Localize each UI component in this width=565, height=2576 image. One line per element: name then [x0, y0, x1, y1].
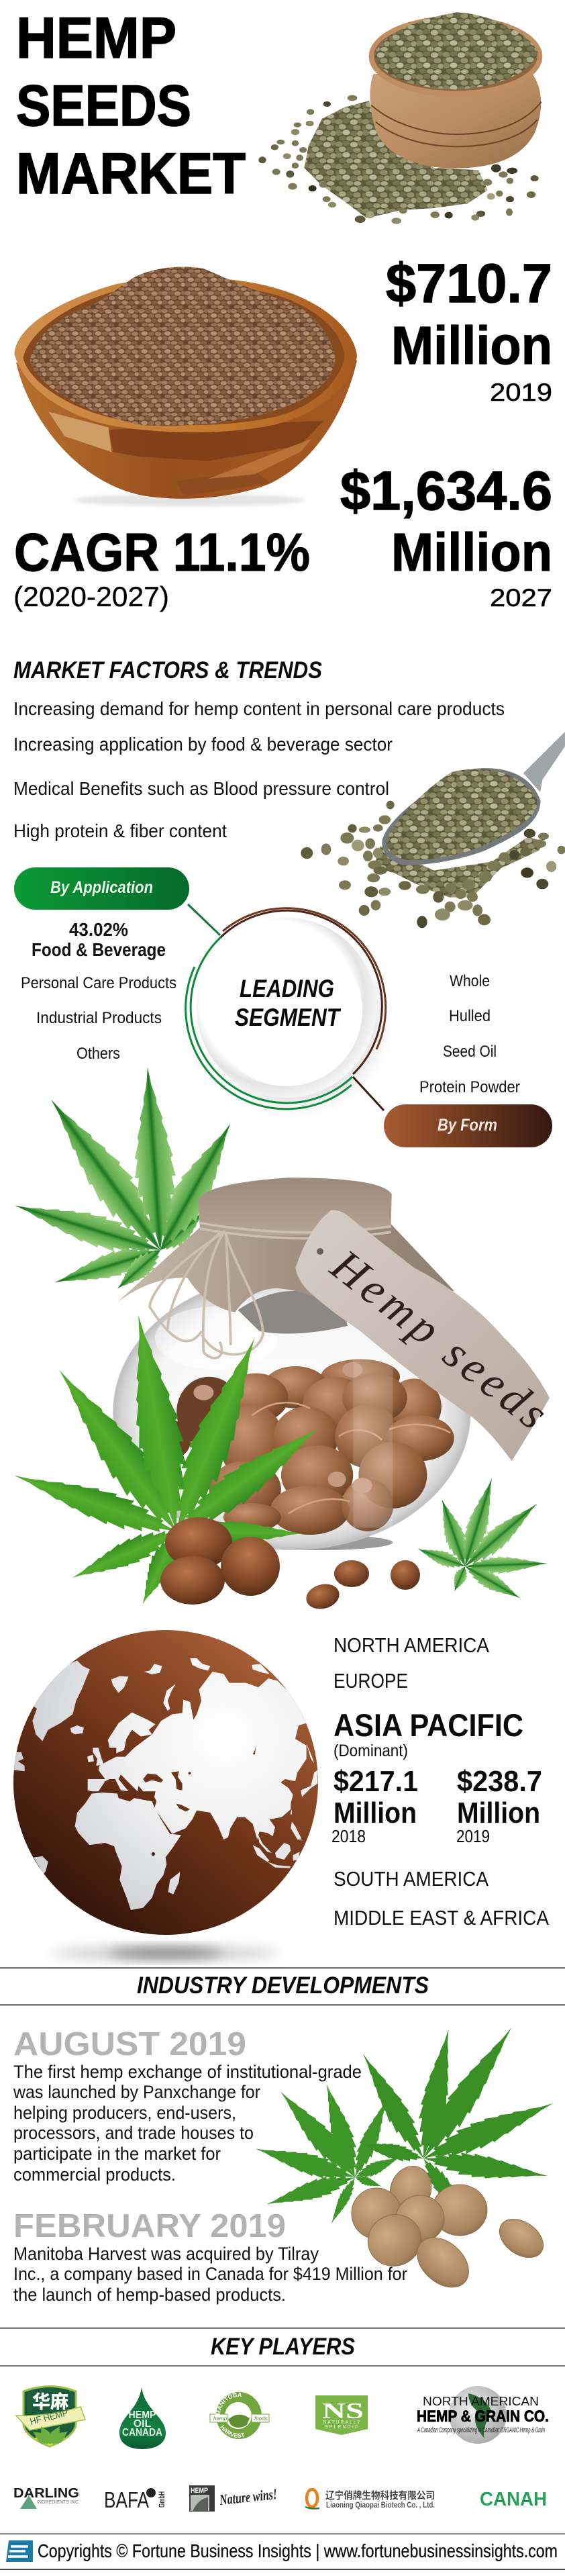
dominant region: asia pacific	[331, 1707, 542, 1846]
market factors list: High protein & fiber content	[13, 820, 227, 841]
value 2027: Million	[391, 522, 552, 582]
logo: HF Hemp	[16, 2386, 85, 2448]
application segments list: Food & Beverage	[32, 939, 166, 960]
logo: Hempflax: HEMP	[191, 2487, 208, 2495]
image: spoon with hemp seeds	[301, 732, 565, 928]
form segments list: Whole	[450, 972, 490, 990]
value 2027: $1,634.6	[340, 461, 552, 522]
logo: Liaoning Qiaopai Biotech: 辽宁俏牌生物科技有限公司	[325, 2489, 435, 2501]
heading: market factors and trends: MARKET FACTORS & TRENDS	[13, 657, 322, 683]
CAGR: CAGR 11.1%	[14, 522, 310, 582]
development: August 2019: commercial products.	[13, 2164, 176, 2185]
development: February 2019: the launch of hemp-based products.	[13, 2285, 286, 2305]
value 2019	[386, 253, 552, 406]
hang tag label: Hemp seeds	[321, 1239, 558, 1439]
dominant region: asia pacific: $217.1	[333, 1765, 418, 1798]
icon: small hemp leaf	[415, 1475, 548, 1606]
logo: Naturally Splendid	[315, 2395, 368, 2435]
development: February 2019	[13, 2208, 407, 2305]
development: August 2019: participate in the market for	[13, 2144, 221, 2164]
development: August 2019: was launched by Panxchange for	[13, 2082, 260, 2102]
regional list: SOUTH AMERICA	[333, 1867, 489, 1891]
dominant region: asia pacific: 2018	[331, 1826, 366, 1846]
development: August 2019: AUGUST 2019	[13, 2026, 246, 2062]
logo: Manitoba Harvest: foods	[254, 2416, 268, 2422]
application segments list: 43.02%	[69, 919, 128, 940]
heading: key players: KEY PLAYERS	[211, 2334, 355, 2360]
pill: by application	[14, 867, 189, 910]
regional list	[333, 1633, 549, 1929]
logo: Darling Ingredients: INGREDIENTS INC.	[37, 2500, 80, 2505]
illustration: glass jar of hemp seeds	[113, 1274, 470, 1550]
regional list: EUROPE	[333, 1669, 408, 1692]
logo: Naturally Splendid: NATURALLY	[323, 2420, 360, 2425]
dominant region: asia pacific: (Dominant)	[333, 1742, 408, 1760]
title	[16, 6, 246, 206]
market factors list: Medical Benefits such as Blood pressure control	[13, 778, 389, 799]
logo: Darling Ingredients	[13, 2486, 80, 2509]
illustration: globe	[13, 1630, 318, 1959]
logo: Naturally Splendid: NS	[322, 2399, 364, 2424]
pill: by form	[384, 1104, 552, 1147]
logo: BAFA: GmbH	[157, 2491, 166, 2508]
logo: Hemp Oil Canada	[119, 2387, 166, 2449]
application segments list	[21, 919, 176, 1063]
value 2019: Million	[391, 316, 552, 375]
dominant region: asia pacific: ASIA PACIFIC	[333, 1707, 523, 1743]
logo: Manitoba Harvest	[209, 2392, 270, 2439]
application segments list: Others	[76, 1045, 120, 1063]
CAGR	[13, 522, 310, 612]
logo: Hemp Oil Canada: CANADA	[122, 2427, 162, 2438]
development: February 2019: Inc., a company based in Canada for $419 Million for	[13, 2264, 407, 2284]
logo: Manitoba Harvest: HARVEST	[220, 2425, 244, 2438]
logo: HF Hemp: 华麻	[32, 2392, 68, 2412]
text: leading segment	[235, 975, 342, 1031]
heading: industry developments: INDUSTRY DEVELOPMENTS	[137, 1972, 429, 1999]
logo: Naturally Splendid: SPLENDID	[325, 2425, 358, 2430]
development: August 2019: The first hemp exchange of institutional-grade	[13, 2062, 362, 2082]
development: February 2019: FEBRUARY 2019	[13, 2208, 286, 2244]
logo: Darling Ingredients: DARLING	[13, 2486, 79, 2501]
development: February 2019: Manitoba Harvest was acquired by Tilray	[13, 2244, 319, 2264]
pill: by application: By Application	[50, 878, 153, 897]
logo: Canah: CANAH	[480, 2489, 547, 2510]
value 2027: 2027	[490, 584, 552, 612]
value 2019: 2019	[490, 379, 552, 406]
logo: North American Hemp and Grain Co: HEMP & GRAIN CO.	[417, 2407, 549, 2426]
regional list: NORTH AMERICA	[333, 1633, 489, 1657]
form segments list: Protein Powder	[419, 1078, 520, 1096]
diagram: leading segment ring	[186, 904, 386, 1110]
pill: by form: By Form	[438, 1116, 497, 1135]
logo: Hemp Oil Canada: HEMP	[129, 2410, 156, 2421]
text: leading segment: LEADING	[240, 975, 334, 1002]
icon: dark green hemp leaf in front of jar	[9, 1311, 328, 1609]
form segments list	[419, 972, 520, 1096]
logo: HF Hemp: HF HEMP	[29, 2407, 69, 2427]
icon: light green hemp leaf behind jar	[10, 1066, 246, 1296]
text: leading segment: SEGMENT	[235, 1004, 342, 1031]
application segments list: Industrial Products	[36, 1009, 162, 1027]
image: large wooden bowl of brown hemp seeds	[14, 267, 357, 506]
logo: North American Hemp and Grain Co	[417, 2386, 549, 2444]
development: August 2019	[13, 2026, 362, 2185]
dominant region: asia pacific: Million	[333, 1797, 417, 1829]
form segments list: Seed Oil	[443, 1043, 497, 1061]
logo: Manitoba Harvest: MANITOBA	[216, 2393, 242, 2414]
dominant region: asia pacific: $238.7	[457, 1765, 542, 1798]
seeds in front of jar	[160, 1517, 420, 1613]
market factors list: Increasing demand for hemp content in personal care products	[13, 698, 505, 719]
market factors list	[13, 698, 505, 841]
jar cloth lid and string	[117, 1178, 454, 1358]
title: SEEDS	[16, 74, 191, 138]
logo: Hempflax	[189, 2485, 278, 2512]
development: August 2019: processors, and trade houses to	[13, 2123, 254, 2143]
title: MARKET	[16, 142, 246, 206]
image: wooden bowl with scattered hemp seeds	[258, 12, 542, 224]
application segments list: Personal Care Products	[21, 974, 176, 992]
value 2019: $710.7	[386, 253, 552, 314]
illustration: hemp leaves and raw seeds	[253, 2020, 558, 2297]
dominant region: asia pacific: Million	[457, 1797, 540, 1829]
title: HEMP	[16, 6, 176, 70]
development: August 2019: helping producers, end-users,	[13, 2103, 236, 2123]
form segments list: Hulled	[449, 1007, 491, 1025]
CAGR: (2020-2027)	[13, 581, 169, 612]
dominant region: asia pacific: 2019	[456, 1826, 490, 1846]
logo: BAFA: BAFA	[104, 2487, 149, 2512]
market factors list: Increasing application by food & beverage sector	[13, 734, 393, 755]
logo: Liaoning Qiaopai Biotech: Liaoning Qiaopai Biotech Co. , Ltd.	[326, 2500, 435, 2510]
logo: Hempflax: Nature wins!	[218, 2485, 278, 2508]
logo: Hemp Oil Canada: OIL	[134, 2418, 152, 2430]
logo: Manitoba Harvest: hemp	[213, 2416, 227, 2422]
value 2027	[340, 461, 552, 612]
logo: Liaoning Qiaopai Biotech	[305, 2489, 435, 2510]
logo: North American Hemp and Grain Co: NORTH AMERICAN	[423, 2395, 539, 2408]
